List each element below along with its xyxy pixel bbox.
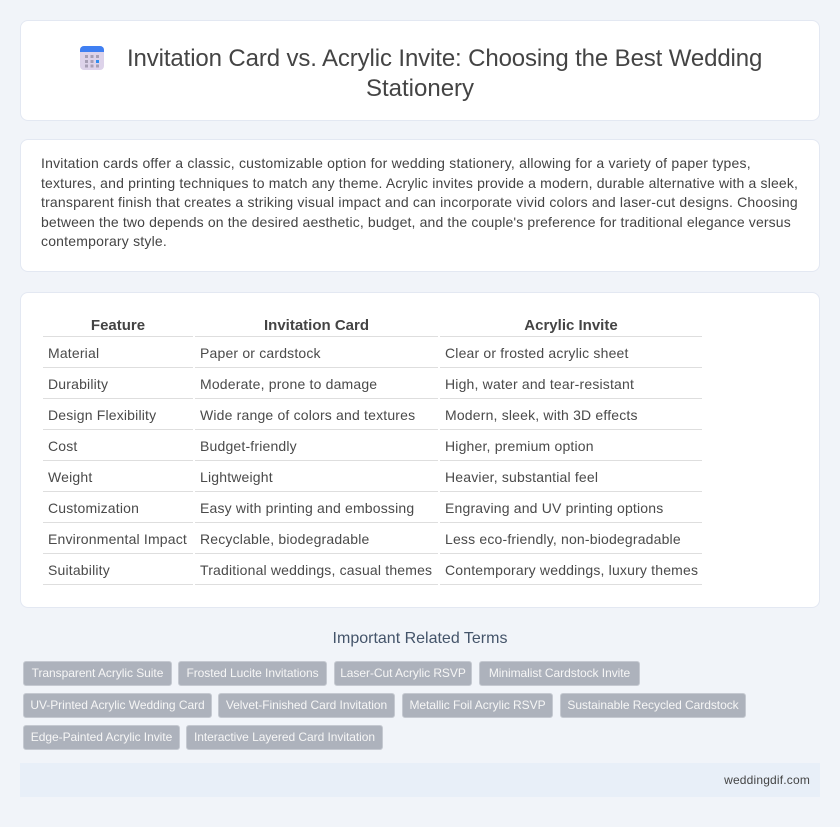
- intro text: contemporary style.: [41, 233, 167, 249]
- panel: comparison table: [20, 292, 820, 608]
- title: Invitation Card vs. Acrylic Invite: Choosing the Best Wedding: [127, 45, 762, 72]
- comparison table: [43, 317, 702, 585]
- tag: Velvet-Finished Card Invitation: [226, 698, 387, 712]
- comparison table: Less eco-friendly, non-biodegradable: [445, 531, 681, 547]
- tag: [178, 661, 327, 686]
- comparison table: Contemporary weddings, luxury themes: [445, 562, 698, 578]
- tag: Transparent Acrylic Suite: [32, 666, 163, 680]
- comparison table: Modern, sleek, with 3D effects: [445, 407, 638, 423]
- tag: UV-Printed Acrylic Wedding Card: [30, 698, 205, 712]
- intro text: transparent finish that creates a striking visual impact and can incorporate vivid colors and laser-cut designs. Choosing: [41, 194, 798, 210]
- comparison table: Paper or cardstock: [200, 345, 321, 361]
- comparison table: Invitation Card: [264, 317, 369, 334]
- tag: [479, 661, 640, 686]
- tag: Minimalist Cardstock Invite: [489, 666, 630, 680]
- tag: [186, 725, 383, 750]
- comparison table: Budget-friendly: [200, 438, 297, 454]
- tag: [23, 725, 180, 750]
- title: [127, 45, 762, 102]
- tag: [402, 693, 553, 718]
- comparison table: Traditional weddings, casual themes: [200, 562, 432, 578]
- row: design flexibility: Design Flexibility: [48, 407, 156, 423]
- intro text: Invitation cards offer a classic, customizable option for wedding stationery, allowing for a variety of paper types,: [41, 155, 751, 171]
- tag: [334, 661, 472, 686]
- comparison table: Easy with printing and embossing: [200, 500, 414, 516]
- comparison table: Heavier, substantial feel: [445, 469, 598, 485]
- comparison table: Wide range of colors and textures: [200, 407, 415, 423]
- comparison table: Engraving and UV printing options: [445, 500, 663, 516]
- footer source: weddingdif.com: [724, 773, 810, 787]
- comparison table: Higher, premium option: [445, 438, 594, 454]
- row: weight: Weight: [48, 469, 92, 485]
- tag: Interactive Layered Card Invitation: [194, 730, 375, 744]
- comparison table: Clear or frosted acrylic sheet: [445, 345, 629, 361]
- intro text: [41, 155, 798, 249]
- tag: [23, 661, 172, 686]
- intro text: between the two depends on the desired aesthetic, budget, and the couple's preference for traditional elegance versus: [41, 214, 791, 230]
- tag: [218, 693, 395, 718]
- tag: Frosted Lucite Invitations: [186, 666, 319, 680]
- row: durability: Durability: [48, 376, 108, 392]
- tags: related terms: [23, 661, 746, 750]
- tag: Edge-Painted Acrylic Invite: [31, 730, 172, 744]
- row: customization: Customization: [48, 500, 139, 516]
- title: Stationery: [366, 75, 474, 102]
- row: material: Material: [48, 345, 99, 361]
- comparison table: Lightweight: [200, 469, 273, 485]
- comparison table: Moderate, prone to damage: [200, 376, 377, 392]
- footer: [20, 763, 820, 797]
- panel: title header: [20, 20, 820, 121]
- comparison table: Recyclable, biodegradable: [200, 531, 370, 547]
- panel: introduction: [20, 139, 820, 272]
- tag: Laser-Cut Acrylic RSVP: [340, 666, 466, 680]
- row: environmental impact: Environmental Impact: [48, 531, 187, 547]
- table header: Feature: [91, 317, 145, 334]
- intro text: textures, and printing techniques to match any theme. Acrylic invites provide a modern, durable alternative with a sleek,: [41, 175, 798, 191]
- heading: related terms: Important Related Terms: [333, 630, 507, 647]
- row: cost: Cost: [48, 438, 78, 454]
- tag: Sustainable Recycled Cardstock: [567, 698, 739, 712]
- icon: calendar: [80, 46, 104, 70]
- comparison table: High, water and tear-resistant: [445, 376, 634, 392]
- row: suitability: Suitability: [48, 562, 110, 578]
- tag: [23, 693, 212, 718]
- tag: [560, 693, 746, 718]
- tag: Metallic Foil Acrylic RSVP: [409, 698, 546, 712]
- comparison table: Acrylic Invite: [524, 317, 618, 334]
